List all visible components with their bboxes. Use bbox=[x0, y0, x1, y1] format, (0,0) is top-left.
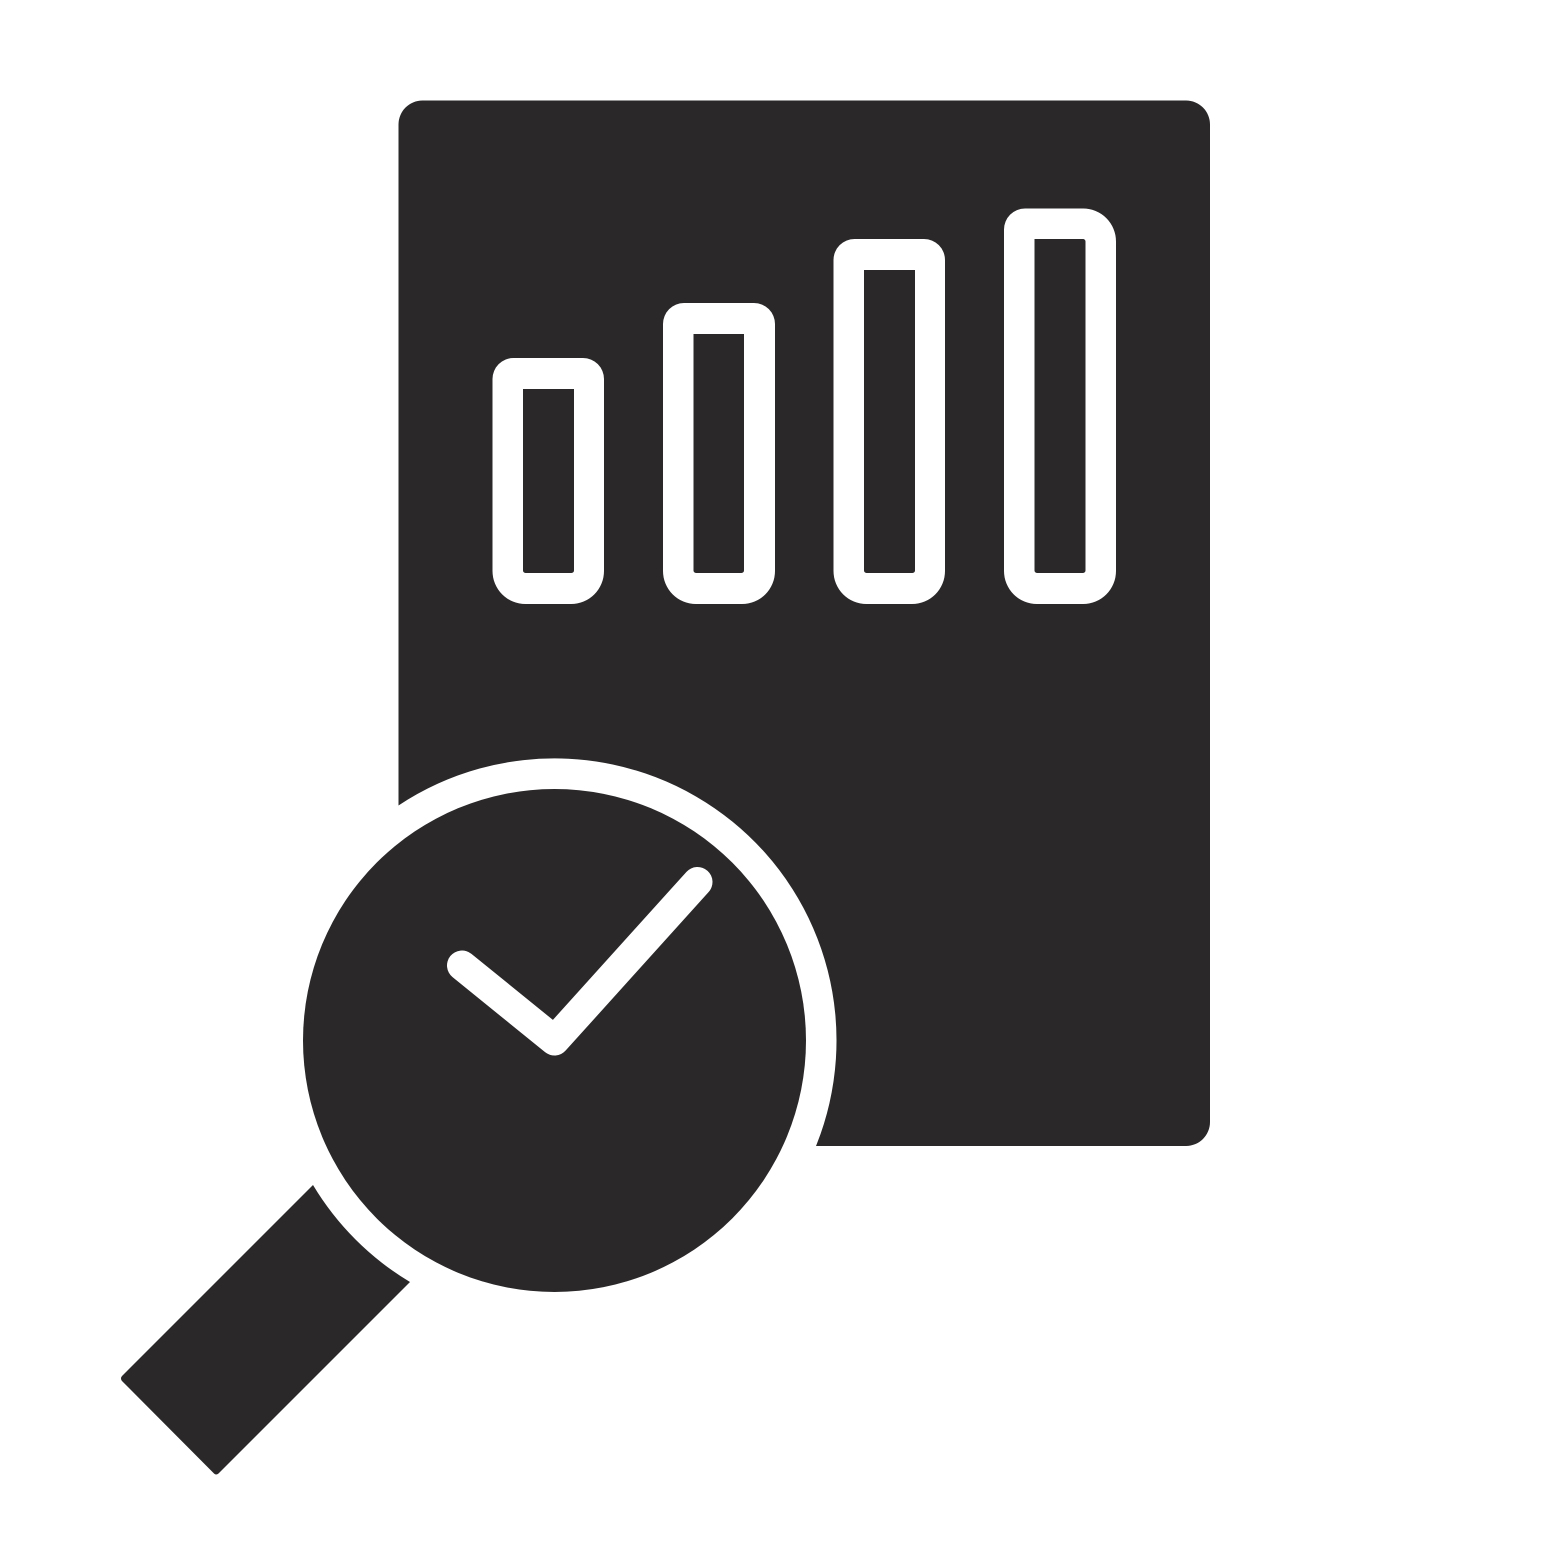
bar chart bbox=[492, 208, 1116, 604]
icon: check mark bbox=[462, 882, 698, 1040]
bar 1 bbox=[492, 358, 604, 604]
bar 4 bbox=[1004, 208, 1116, 604]
magnifying glass lens bbox=[303, 789, 806, 1292]
bar 3 bbox=[834, 239, 945, 604]
magnifying glass handle bbox=[121, 1185, 410, 1474]
bar 2 bbox=[663, 303, 775, 604]
document panel bbox=[398, 100, 1210, 1146]
